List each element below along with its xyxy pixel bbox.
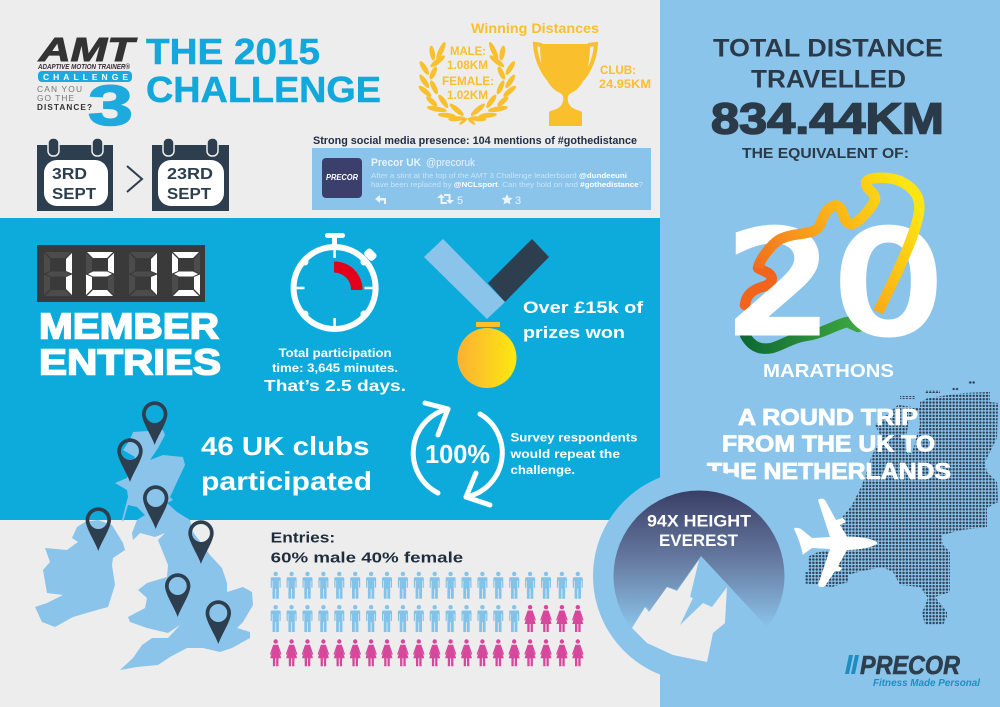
text: round trip	[707, 404, 951, 484]
title	[146, 31, 381, 110]
text: round trip: FROM THE UK TO	[722, 431, 935, 457]
text: participation time: time: 3,645 minutes.	[272, 363, 398, 375]
title: THE 2015	[146, 31, 320, 72]
text: male and female winning distances: 1.02KM	[447, 88, 488, 102]
tweet author: @precoruk	[426, 157, 475, 169]
red elapsed-time arc	[334, 261, 363, 290]
text: prizes	[523, 298, 643, 342]
text: club winning distance: CLUB:	[600, 63, 636, 77]
icon: laurel wreath	[417, 41, 517, 126]
icon: Precor avatar: PRECOR	[326, 173, 358, 182]
icon: reply	[375, 195, 386, 204]
heading: winning distances: Winning Distances	[471, 20, 599, 36]
logo: AMT Challenge 3: DISTANCE?	[37, 103, 92, 112]
logo: AMT Challenge 3: AMT	[38, 31, 138, 68]
digit 1 again	[129, 252, 157, 296]
logo: AMT Challenge 3: ADAPTIVE MOTION TRAINER®	[37, 62, 130, 71]
map pins	[86, 401, 231, 644]
text: club winning distance: 24.95KM	[599, 77, 651, 91]
graphic: 20 marathons with route	[727, 178, 944, 366]
icon: aeroplane	[793, 498, 878, 587]
icon: star	[501, 194, 513, 204]
icon: repeat arrows	[413, 403, 502, 505]
arrow: date range	[127, 166, 142, 192]
text: survey: Survey respondents	[510, 431, 638, 445]
calendar: 23rd Sept: SEPT	[167, 186, 211, 203]
calendar: 3rd Sept	[37, 138, 113, 211]
digit 2	[86, 252, 114, 296]
text: round trip: THE NETHERLANDS	[707, 458, 951, 484]
icon: retweet	[437, 194, 454, 204]
map: UK and Ireland	[35, 430, 253, 670]
digit 1	[44, 252, 72, 296]
favourite count: 3	[515, 195, 521, 207]
digit 5	[172, 252, 200, 296]
text: 100%: 100%	[425, 439, 490, 469]
text: survey: challenge.	[510, 463, 575, 477]
text: participation time: That’s 2.5 days.	[264, 378, 406, 395]
icon: trophy	[535, 44, 596, 126]
text: prizes: Over £15k of	[523, 298, 643, 317]
text: clubs: 46 UK clubs	[201, 431, 370, 461]
logo: AMT Challenge 3: 3	[88, 74, 133, 138]
text: male and female winning distances: MALE:	[450, 44, 486, 58]
text: participation time: Total participation	[279, 348, 392, 360]
logo: AMT Challenge 3: GO THE	[37, 93, 74, 103]
text: male and female winning distances: FEMALE:	[442, 74, 494, 88]
logo: AMT Challenge 3: CHALLENGE	[43, 72, 128, 82]
icon: stopwatch	[294, 233, 378, 329]
calendar: 23rd Sept	[152, 138, 229, 211]
logo: AMT Challenge 3: CAN YOU	[37, 84, 82, 94]
text: the equivalent of: THE EQUIVALENT OF:	[742, 146, 909, 162]
map: dotted Netherlands	[800, 381, 998, 625]
tweet author: Precor UK	[371, 157, 421, 169]
text: survey	[509, 431, 638, 477]
numerals: 20: 0	[833, 203, 944, 366]
tweet author	[371, 157, 475, 169]
logo: Precor: Fitness Made Personal	[873, 678, 980, 689]
tweet body: After a stint at the top of the AMT 3 Challenge leaderboard @dundeeuni	[371, 171, 627, 180]
text: male and female winning distances	[442, 44, 494, 102]
flip counter: 1215	[37, 245, 205, 302]
label: 94x height Everest	[647, 512, 752, 550]
heading: total distance: TOTAL DISTANCE	[713, 35, 943, 63]
panel: total distance	[660, 0, 1000, 707]
route: over the numerals	[758, 178, 919, 312]
text: club winning distance	[599, 63, 651, 91]
heading: total distance: TRAVELLED	[751, 66, 906, 94]
label: marathons: MARATHONS	[763, 360, 894, 381]
logo: Precor: PRECOR	[860, 650, 960, 680]
heading: social media: Strong social media presence: 104 mentions of #gothedistance	[313, 135, 637, 147]
heading: member entries: MEMBER	[39, 306, 219, 346]
route: behind the numerals	[745, 268, 858, 349]
figure: 834.44KM: 834.44KM	[711, 94, 944, 144]
panel: tweet	[312, 148, 651, 210]
text: entries split: Entries:	[271, 530, 335, 547]
calendar: 23rd Sept: 23RD	[167, 166, 213, 183]
heading: member entries	[39, 306, 221, 382]
heading: total distance	[713, 35, 943, 94]
text: entries split	[271, 530, 463, 567]
text: clubs: participated	[201, 466, 372, 496]
text: survey: would repeat the	[509, 447, 620, 461]
icon: Precor avatar	[322, 158, 362, 198]
calendar: 3rd Sept: SEPT	[52, 186, 96, 203]
tweet body	[371, 171, 643, 189]
numerals: 20	[727, 203, 944, 366]
text: prizes: prizes won	[523, 323, 625, 342]
mountain	[632, 556, 768, 662]
logo: Precor	[845, 650, 980, 689]
text: male and female winning distances: 1.08KM	[447, 58, 488, 72]
panel: member stats band	[0, 218, 660, 520]
numerals: 20: 2	[727, 203, 832, 366]
text: entries split: 60% male 40% female	[271, 550, 463, 567]
label: 94x height Everest: EVEREST	[659, 531, 739, 550]
tweet body: have been replaced by @NCLsport . Can they hold on and #gothedistance ?	[371, 180, 643, 189]
text: participation time	[264, 348, 406, 395]
label: 94x height Everest: 94X HEIGHT	[647, 512, 752, 531]
icon: medal	[424, 239, 549, 388]
title: CHALLENGE	[146, 69, 381, 110]
pictogram: male and female entrants	[270, 572, 584, 666]
logo: AMT Challenge 3	[37, 31, 138, 138]
retweet count: 5	[457, 195, 463, 207]
text: clubs	[201, 431, 372, 496]
calendar: 3rd Sept: 3RD	[52, 166, 87, 183]
text: round trip: A ROUND TRIP	[738, 404, 918, 430]
heading: member entries: ENTRIES	[39, 342, 221, 382]
badge: Everest	[593, 470, 805, 682]
